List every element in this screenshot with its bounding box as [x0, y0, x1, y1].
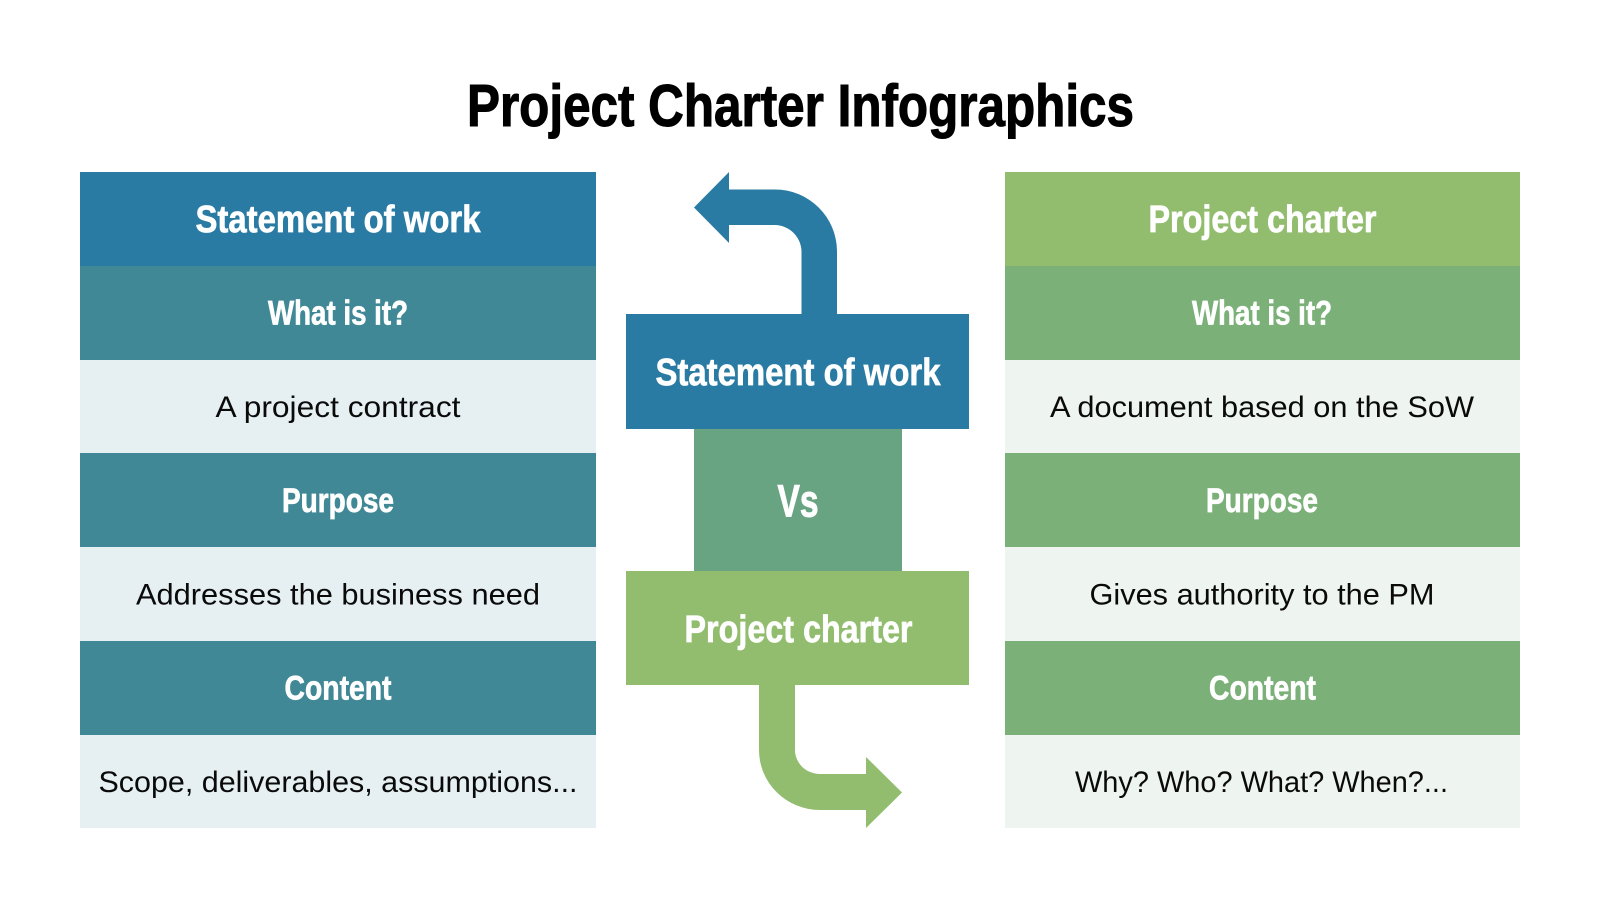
row heading: purpose [80, 453, 596, 547]
row text: addresses the business need [80, 547, 596, 641]
row text: addresses the business need: Addresses the business need [136, 578, 540, 612]
row heading: content [1005, 641, 1520, 735]
title: Project Charter Infographics [467, 73, 1134, 139]
row text: scope, deliverables, assumptions [80, 735, 596, 828]
panel: project charter column [1005, 172, 1520, 828]
row heading: what is it: What is it? [268, 294, 408, 332]
row heading: content: Content [284, 670, 392, 708]
arrow: green curved arrow pointing right [759, 683, 902, 828]
panel: statement of work column [80, 172, 596, 828]
row heading: purpose: Purpose [1206, 482, 1318, 520]
arrow: blue curved arrow pointing left [694, 172, 837, 316]
row heading: what is it: What is it? [1192, 294, 1332, 332]
row heading: content [80, 641, 596, 735]
row heading: what is it [1005, 266, 1520, 360]
row text: gives authority to the pm: Gives authority to the PM [1090, 578, 1434, 612]
center box: project charter: Project charter [684, 609, 913, 651]
heading: statement of work [80, 172, 596, 266]
heading: statement of work: Statement of work [196, 199, 481, 241]
row text: a project contract [80, 360, 596, 453]
heading: project charter [1005, 172, 1520, 266]
center box: vs [694, 429, 902, 571]
row text: a document based on the sow: A document based on the SoW [1050, 391, 1475, 424]
center box: vs: Vs [778, 476, 818, 526]
row text: a document based on the sow [1005, 360, 1520, 453]
row heading: purpose: Purpose [282, 482, 394, 520]
center box: project charter [626, 571, 969, 685]
row text: scope, deliverables, assumptions: Scope, deliverables, assumptions... [98, 766, 578, 799]
row text: gives authority to the pm [1005, 547, 1520, 641]
row heading: purpose [1005, 453, 1520, 547]
heading: project charter: Project charter [1148, 199, 1377, 241]
row heading: content: Content [1209, 670, 1316, 708]
row text: why who what when: Why? Who? What? When?... [1075, 766, 1448, 799]
row text: a project contract: A project contract [216, 391, 461, 424]
row text: why who what when [1005, 735, 1520, 828]
row heading: what is it [80, 266, 596, 360]
center box: statement of work [626, 314, 969, 429]
center box: statement of work: Statement of work [656, 352, 941, 394]
